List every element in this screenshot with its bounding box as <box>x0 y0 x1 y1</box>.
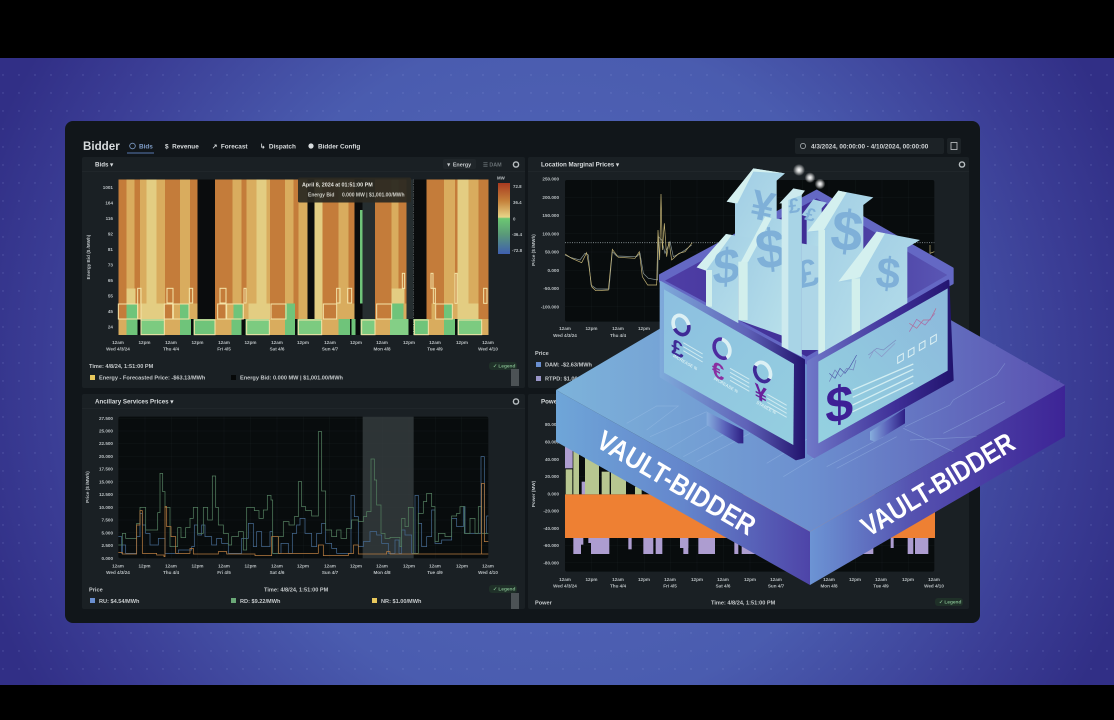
heatmap axis labels: 45 <box>108 309 113 314</box>
panel: power: Thu 4/4 <box>610 584 626 588</box>
panel: power: Mon 4/8 <box>820 584 838 588</box>
panel: power: 12am <box>612 577 624 582</box>
panel: bids heatmap: ▼ Energy <box>446 162 471 168</box>
panel: location marginal prices: Price ($ /MWh) <box>531 234 536 266</box>
panel: power: 12am <box>928 577 940 582</box>
panel: power: -40.000 <box>543 526 559 531</box>
ancillary line chart <box>118 417 488 558</box>
panel: ancillary services prices: Fri 4/5 <box>217 570 231 575</box>
heatmap colour scale <box>497 176 523 254</box>
panel: location marginal prices: -100.000 <box>541 304 559 310</box>
panel: ancillary services prices: 12pm <box>350 564 362 568</box>
platform right side <box>810 385 1065 585</box>
donut charts <box>670 313 774 384</box>
left monitor: STABLE % <box>755 400 777 415</box>
panel: ancillary services prices: 12am <box>165 564 177 568</box>
panel: power: -80.000 <box>543 560 559 566</box>
heatmap axis labels: 65 <box>108 278 113 283</box>
panel: ancillary services prices: Price ($ /MWh) <box>85 471 90 503</box>
panel: power: 80.000 <box>545 422 559 427</box>
bid outlines <box>118 273 487 335</box>
tooltip: Energy Bid <box>308 192 334 198</box>
right stand <box>870 408 905 442</box>
panel: ancillary services prices: 12am <box>376 564 388 568</box>
panel: location marginal prices: -50.000 <box>543 286 559 291</box>
panel: power: -60.000 <box>543 543 559 548</box>
arrow: large pound shaft <box>793 243 823 350</box>
panel: bids heatmap: Thu 4/4 <box>163 346 179 352</box>
panel: bids heatmap: 12pm <box>191 340 204 345</box>
box back rim <box>660 191 953 363</box>
heatmap chart <box>118 179 488 335</box>
panel: location marginal prices: Thu 4/4 <box>610 333 626 338</box>
panel: location marginal prices: 250.000 <box>542 176 559 182</box>
screen text lines <box>683 343 787 417</box>
panel: location marginal prices: 12am <box>559 326 571 331</box>
dashboard header: ↳ Dispatch <box>260 144 296 150</box>
panel: bids heatmap: 12am <box>324 340 336 345</box>
panel: power: 12pm <box>691 577 703 582</box>
panel: bids heatmap: Wed 4/3/24 <box>106 346 130 352</box>
currency symbols: € <box>712 356 724 387</box>
heatmap colour scale: MW <box>497 176 506 180</box>
heatmap axis labels: 73 <box>108 262 113 268</box>
heatmap axis labels: 92 <box>108 232 113 236</box>
panel: power: 12am <box>664 577 676 582</box>
panel: ancillary services prices: Wed 4/3/24 <box>106 570 130 575</box>
arrow: small pound back: £ <box>803 203 818 226</box>
panel: bids heatmap: 12am <box>112 340 124 345</box>
dashboard header: Bids <box>139 144 153 150</box>
dashboard header <box>83 138 961 154</box>
panel: power: Sat 4/6 <box>716 584 731 588</box>
panel: ancillary services prices: 17.500 <box>99 466 113 472</box>
ancillary legend: RU: $4.54/MWh <box>99 599 140 605</box>
dollar symbol: $ <box>825 373 853 435</box>
power legend: Power <box>535 600 553 606</box>
power legend: ✓ Legend <box>939 600 961 606</box>
heatmap colour scale: -72.8 <box>512 248 523 253</box>
glowing lights <box>793 164 825 189</box>
tooltip: April 8, 2024 at 01:51:00 PM <box>302 182 373 188</box>
ancillary legend <box>89 585 519 609</box>
arrow: tall pound <box>779 188 805 357</box>
panel: bids heatmap: 12am <box>218 340 230 345</box>
panel: ancillary services prices: 12pm <box>403 564 415 568</box>
panel: power: -20.000 <box>543 508 559 514</box>
heatmap legend <box>89 362 519 386</box>
panel: bids heatmap: 12am <box>165 340 177 345</box>
ancillary legend: Time: 4/8/24, 1:51:00 PM <box>264 588 329 594</box>
panel: location marginal prices: 12pm <box>585 326 598 331</box>
panel: location marginal prices: 100.000 <box>542 232 559 236</box>
panel: ancillary services prices: 12am <box>429 564 441 568</box>
panel: ancillary services prices: Sun 4/7 <box>322 570 339 575</box>
panel: location marginal prices: Location Marginal Prices ▾ <box>541 162 620 168</box>
panel: bids heatmap: Sun 4/7 <box>322 346 339 352</box>
panel: power: Wed 4/3/24 <box>553 584 577 588</box>
panel: power: Sun 4/7 <box>768 584 785 588</box>
panel: bids heatmap: Mon 4/8 <box>373 346 391 352</box>
panel: location marginal prices: 150.000 <box>542 213 559 218</box>
panel: ancillary services prices: 12am <box>482 564 494 568</box>
panel: bids heatmap: Bids ▾ <box>95 162 114 168</box>
heatmap colour scale: 0 <box>513 216 516 222</box>
panel: ancillary services prices: 2.500 <box>102 543 113 548</box>
LMP line chart <box>565 180 934 322</box>
panel: ancillary services prices: 12.500 <box>99 492 113 497</box>
heatmap axis labels: 81 <box>108 247 113 252</box>
tooltip: 0.000 MW | $1,001.00/MWh <box>342 192 405 198</box>
arrow: big right dollar <box>807 191 873 357</box>
panel: location marginal prices: 12am <box>612 326 624 331</box>
panel: power: 40.000 <box>545 457 559 462</box>
panel: ancillary services prices: 12pm <box>456 564 468 568</box>
mini squares <box>898 334 936 363</box>
panel: bids heatmap: 12am <box>482 340 494 345</box>
arrow: large pound shaft: £ <box>793 251 823 297</box>
panel: power: 12am <box>823 577 835 582</box>
ancillary legend: ✓ Legend <box>493 586 515 592</box>
panel: ancillary services prices: 27.500 <box>99 416 113 421</box>
arrow: left small dollar <box>697 234 753 327</box>
panel: power: 12pm <box>744 577 756 582</box>
panel: bids heatmap: 12am <box>271 340 283 345</box>
panel: power: 0.000 <box>548 492 559 496</box>
panel: ancillary services prices: 12am <box>324 564 336 568</box>
arrow: large left dollar: $ <box>752 216 789 281</box>
dashboard window <box>65 121 980 623</box>
LMP legend <box>535 351 593 382</box>
left stand <box>707 412 743 443</box>
dashboard header: Bidder Config <box>318 144 360 150</box>
arrow: small pound back <box>802 199 827 260</box>
panel: power: 12pm <box>638 577 650 582</box>
panel: ancillary services prices: 12pm <box>244 564 257 568</box>
right side label: VAULT-BIDDER <box>855 427 1020 542</box>
ancillary legend: NR: $1.00/MWh <box>381 599 422 605</box>
panel: power: Power (MW) <box>531 480 536 507</box>
left monitor: INCREASE % <box>713 376 739 394</box>
panel: ancillary services prices: Thu 4/4 <box>163 570 179 575</box>
panel: bids heatmap <box>82 157 525 388</box>
arrow: big right dollar: $ <box>827 199 866 265</box>
left side label: VAULT-BIDDER <box>592 424 761 541</box>
panel: power: 12pm <box>849 577 861 582</box>
heatmap legend: Time: 4/8/24, 1:51:00 PM <box>89 364 154 370</box>
dashboard header: ↗ Forecast <box>212 144 248 150</box>
box interior <box>665 198 947 357</box>
left screen <box>664 289 794 445</box>
mini charts <box>829 308 936 382</box>
panel: ancillary services prices: Tue 4/9 <box>427 570 443 575</box>
panel: bids heatmap: 12pm <box>297 340 309 345</box>
arrow: large left dollar <box>738 216 789 337</box>
panel: location marginal prices: 200.000 <box>542 195 559 200</box>
panel: ancillary services prices: 12pm <box>138 564 151 568</box>
panel: bids heatmap: 12pm <box>403 340 415 345</box>
ancillary legend: Price <box>89 588 103 594</box>
panel: ancillary services prices: 12pm <box>297 564 309 568</box>
power legend: Time: 4/8/24, 1:51:00 PM <box>711 600 776 606</box>
currency symbols <box>671 334 768 410</box>
panel: power <box>528 394 969 609</box>
panel: bids heatmap: 12pm <box>456 340 468 345</box>
panel: ancillary services prices: 15.000 <box>99 480 113 484</box>
right screen <box>818 288 948 443</box>
dashboard header: $ Revenue <box>165 144 199 150</box>
panel: ancillary services prices: Ancillary Services Prices ▾ <box>95 398 174 406</box>
screen lines <box>853 364 913 412</box>
panel: ancillary services prices: Wed 4/10 <box>478 570 498 575</box>
panel: ancillary services prices <box>82 394 525 609</box>
panel: location marginal prices: Wed 4/3/24 <box>553 333 577 338</box>
panel: ancillary services prices: 0.000 <box>102 556 113 561</box>
currency symbols: ¥ <box>755 379 768 410</box>
panel: bids heatmap: Sat 4/6 <box>270 346 285 352</box>
heatmap axis labels: 24 <box>108 324 113 330</box>
monitors and arrows assembly <box>660 164 953 459</box>
panel: ancillary services prices: 5.000 <box>102 530 113 536</box>
panel: ancillary services prices: 12am <box>271 564 283 568</box>
heatmap colour scale: 36.4 <box>513 200 522 205</box>
panel: bids heatmap: Fri 4/5 <box>217 346 231 352</box>
panel: power: 12am <box>717 577 729 582</box>
panel: location marginal prices <box>528 157 969 388</box>
heatmap axis labels: 55 <box>108 294 113 298</box>
currency symbols: £ <box>671 334 684 365</box>
panel: power: 20.000 <box>545 474 559 479</box>
row 24 cells <box>118 319 488 335</box>
panel: ancillary services prices: 25.000 <box>99 428 113 434</box>
panel: power: 12am <box>770 577 782 582</box>
panel: power: 12am <box>875 577 887 582</box>
panel: ancillary services prices: Sat 4/6 <box>270 570 285 575</box>
panel: power: 60.000 <box>545 440 559 444</box>
heatmap axis labels: 1001 <box>103 185 113 190</box>
panel: bids heatmap: Tue 4/9 <box>427 346 443 352</box>
panel: location marginal prices: 50.000 <box>545 250 559 254</box>
row 45 cells <box>118 303 488 319</box>
ancillary legend: RD: $9.22/MWh <box>240 599 281 605</box>
platform left side <box>556 390 810 585</box>
LMP legend: Price <box>535 351 549 357</box>
panel: bids heatmap: 12pm <box>244 340 257 345</box>
arrow: far right dollar <box>838 232 920 360</box>
dashboard header: Bidder <box>83 140 120 153</box>
heatmap colour scale: -36.4 <box>512 232 523 237</box>
arrow: yen: ¥ <box>746 180 779 231</box>
power bar chart <box>565 417 935 572</box>
panel: bids heatmap: 12pm <box>138 340 151 345</box>
panel: power: 12am <box>559 577 571 582</box>
dashboard header: 4/3/2024, 00:00:00 - 4/10/2024, 00:00:00 <box>811 144 929 150</box>
right monitor <box>808 281 953 457</box>
panel: power: 12pm <box>902 577 914 582</box>
panel: power: Fri 4/5 <box>663 584 677 588</box>
left monitor: INCREASE % <box>672 353 699 371</box>
tooltip <box>298 178 411 202</box>
heatmap axis labels: 164 <box>105 200 113 206</box>
platform top face <box>556 240 1065 532</box>
vault-bidder platform <box>556 240 1065 585</box>
heatmap axis labels: 116 <box>106 216 113 221</box>
power legend <box>535 598 963 606</box>
panel: ancillary services prices: 22.500 <box>99 441 113 446</box>
panel: location marginal prices: 12pm <box>638 326 650 331</box>
left monitor <box>661 282 804 459</box>
heatmap legend: Energy - Forecasted Price: -$63.13/MWh <box>99 376 206 382</box>
panel: ancillary services prices: 12am <box>218 564 230 568</box>
LMP legend: DAM: -$2.63/MWh <box>545 362 593 368</box>
panel: location marginal prices: 0.000 <box>548 268 559 273</box>
heatmap colour scale: 72.8 <box>513 184 522 189</box>
panel: bids heatmap: Wed 4/10 <box>478 346 498 352</box>
panel: ancillary services prices: Mon 4/8 <box>373 570 391 575</box>
panel: bids heatmap: Energy Bid ($ /MWh) <box>86 234 91 279</box>
arrow: left small dollar: $ <box>712 238 740 296</box>
panel: bids heatmap: ☰ DAM <box>483 162 502 168</box>
panel: ancillary services prices: 20.000 <box>99 454 113 459</box>
panel: power: Power <box>541 398 560 406</box>
circuit traces <box>627 363 1005 477</box>
panel: bids heatmap: 12am <box>429 340 441 345</box>
panel: power: Wed 4/10 <box>924 584 944 588</box>
arrow: yen <box>727 168 785 270</box>
arrow: tall pound: £ <box>787 194 802 218</box>
arrow: far right dollar: $ <box>874 249 903 299</box>
panel: bids heatmap: 12pm <box>350 340 362 345</box>
panel: power: 12pm <box>585 577 598 582</box>
panel: ancillary services prices: 7.500 <box>102 518 113 522</box>
panel: ancillary services prices: 12am <box>112 564 124 568</box>
LMP legend: RTPD: $1.00 <box>545 376 578 382</box>
panel: ancillary services prices: 12pm <box>191 564 204 568</box>
panel: power: Tue 4/9 <box>873 584 889 588</box>
heatmap legend: ✓ Legend <box>493 364 515 370</box>
panel: ancillary services prices: 10.000 <box>99 505 113 510</box>
panel: bids heatmap: 12am <box>376 340 388 345</box>
heatmap legend: Energy Bid: 0.000 MW | $1,001.00/MWh <box>240 376 343 382</box>
